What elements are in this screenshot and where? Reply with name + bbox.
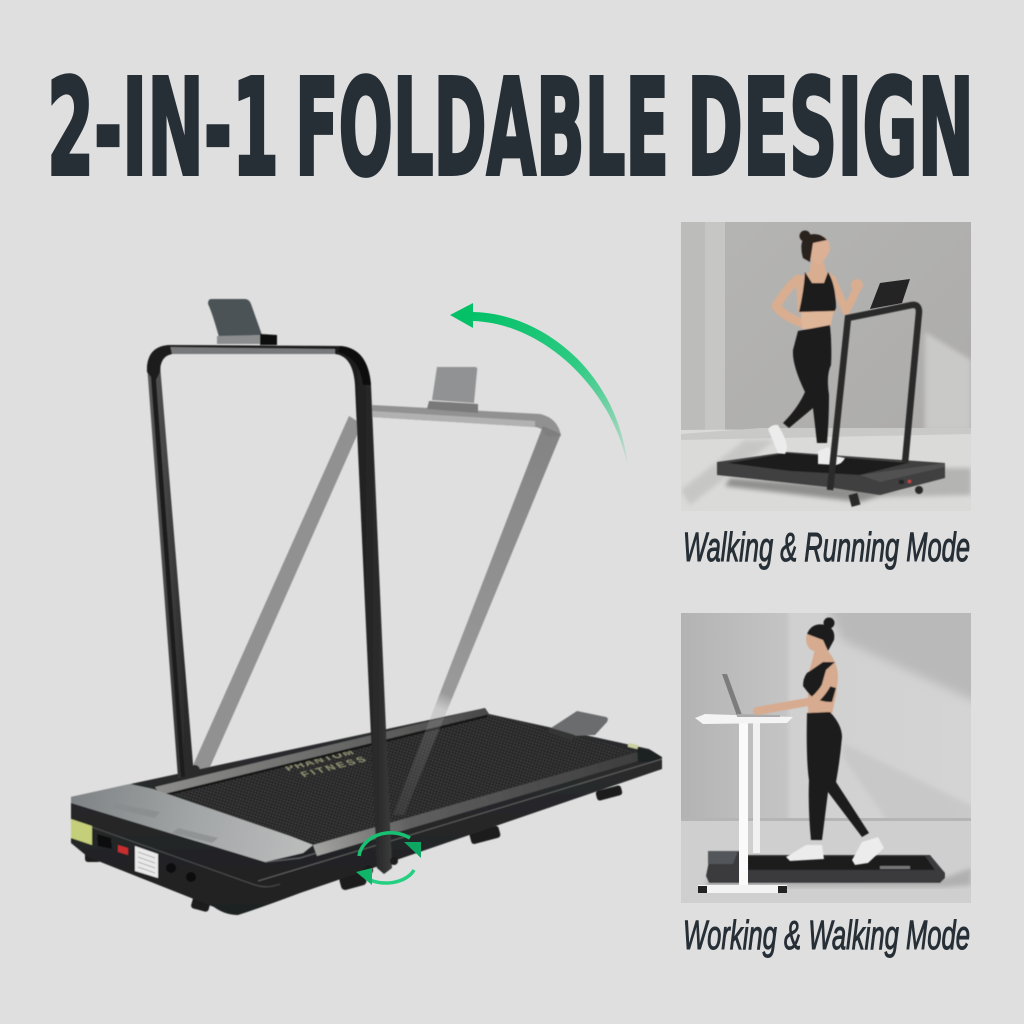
woman standing [757, 618, 884, 865]
running belt [159, 713, 636, 846]
panel display marks [112, 803, 218, 843]
room wall and floor [681, 600, 985, 903]
upper side rail [155, 708, 489, 795]
photo: working and walking mode [681, 600, 985, 903]
laptop [722, 674, 780, 717]
treadmill feet [85, 785, 623, 912]
back handle post [147, 365, 194, 778]
green fold arrow [450, 303, 628, 468]
white standing desk [695, 714, 793, 893]
warning label [71, 819, 92, 845]
ghost folding handle [190, 367, 561, 776]
title [47, 52, 974, 206]
hinge bolts [363, 865, 373, 875]
main treadmill product illustration [71, 299, 662, 915]
side highlight line [258, 759, 662, 881]
woman running [768, 230, 863, 465]
treadmill [706, 851, 971, 887]
ghost right leg over belt [393, 426, 561, 815]
lower side rail [313, 752, 638, 856]
power socket [97, 834, 112, 849]
treadmill [717, 452, 945, 507]
handle [830, 305, 919, 490]
front handle and top bar [147, 345, 392, 874]
red switch [118, 845, 128, 855]
room wall and floor [681, 222, 971, 520]
knobs [166, 863, 176, 873]
right end cap [637, 748, 662, 762]
green rotation arrows at hinge [356, 833, 421, 885]
grey console panel [71, 784, 313, 862]
folded tablet holder [551, 711, 608, 736]
hinge bolt [190, 765, 200, 775]
photo: walking and running mode [681, 222, 971, 520]
main tablet holder [208, 299, 277, 345]
white spec label [135, 846, 158, 878]
tablet [870, 279, 910, 309]
belt logo: PHANTOM [282, 748, 358, 773]
belt logo [282, 746, 371, 781]
title: 2-IN-1 [47, 52, 279, 206]
belt logo: FITNESS [298, 755, 371, 779]
treadmill base body [71, 708, 662, 915]
